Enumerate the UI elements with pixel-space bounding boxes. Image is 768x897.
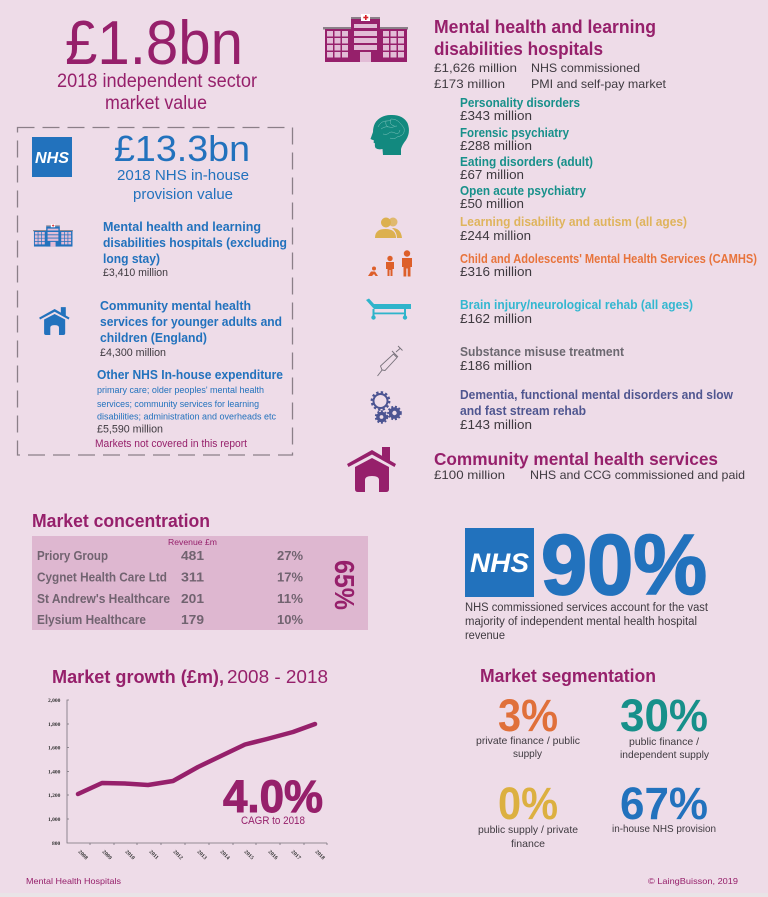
footer: report name: Mental Health Hospitals — [26, 876, 121, 886]
icon: syringe — [378, 346, 402, 376]
headline: independent sector market value: 2018 independent sector — [57, 71, 258, 92]
headline: independent sector market value: £1.8bn — [65, 9, 243, 78]
brain injury — [460, 298, 693, 326]
x axis labels: 2016 — [267, 849, 279, 861]
specialisms: teal group: £288 million — [460, 138, 532, 153]
CAGR callout: 4.0% — [223, 771, 323, 822]
icon: gears — [372, 392, 401, 423]
community services younger adults: children (England) — [100, 330, 207, 345]
specialisms: teal group: £67 million — [460, 167, 524, 182]
description: revenue — [465, 630, 505, 642]
heading: hospitals: £1,626 million — [434, 61, 517, 75]
icon: small house — [39, 307, 70, 335]
heading: community services — [434, 449, 745, 482]
specialisms: teal group — [460, 96, 593, 211]
CAMHS — [460, 252, 757, 279]
y axis labels: 800 — [52, 841, 60, 847]
stat: 67%: in-house NHS provision — [612, 823, 716, 835]
specialisms: teal group: Open acute psychiatry — [460, 184, 586, 198]
y axis labels: 1,200 — [48, 793, 61, 799]
row: St Andrew's: 11% — [277, 591, 303, 606]
NHS value heading — [114, 128, 250, 203]
stat: 67%: 67% — [620, 778, 708, 829]
row: Priory — [37, 548, 303, 563]
callout: NHS 90% — [465, 518, 709, 642]
substance misuse: Substance misuse treatment — [460, 345, 625, 359]
heading — [52, 667, 328, 687]
stat: 3%: private finance / public — [476, 735, 580, 747]
icon: NHS logo: NHS — [35, 150, 69, 167]
stat: 3%: supply — [513, 748, 543, 760]
y axis labels: 1,600 — [48, 746, 61, 752]
heading: hospitals — [434, 17, 667, 91]
y axis labels: 1,000 — [48, 817, 61, 823]
stat: 0%: public supply / private — [478, 824, 578, 836]
x axis labels: 2018 — [314, 849, 326, 861]
x axis labels: 2012 — [172, 849, 184, 861]
hospitals excluding long stay: disabilities hospitals (excluding — [103, 235, 287, 250]
icon: head with brain — [370, 115, 409, 155]
x axis labels: 2010 — [124, 849, 136, 861]
x axis labels: 2014 — [219, 849, 231, 861]
CAMHS: £316 million — [460, 264, 532, 279]
icon: small hospital — [33, 224, 73, 247]
x axis labels: 2017 — [290, 849, 302, 861]
other NHS expenditure: services; community services for learning — [97, 399, 259, 409]
learning disability: £244 million — [460, 228, 531, 243]
stat: 0% — [478, 778, 578, 850]
specialisms: teal group: Forensic psychiatry — [460, 126, 569, 140]
x axis labels: 2013 — [196, 849, 208, 861]
stat: 3% — [476, 690, 580, 760]
learning disability — [460, 215, 687, 243]
row: Cygnet: 17% — [277, 570, 303, 584]
substance misuse — [460, 345, 625, 373]
stat: 0%: finance — [511, 838, 545, 850]
y axis labels: 1,400 — [48, 770, 61, 776]
note: markets not covered: Markets not covered in this report — [95, 438, 247, 450]
icon: NHS logo — [32, 137, 72, 177]
hospitals excluding long stay — [103, 219, 287, 279]
dementia — [460, 388, 733, 432]
panel: market segmentation — [476, 666, 716, 850]
substance misuse: £186 million — [460, 358, 532, 373]
x axis labels: 2009 — [101, 849, 113, 861]
description: majority of independent mental health hospital — [465, 616, 697, 628]
row: Elysium — [37, 612, 303, 627]
row: Priory: Priory Group — [37, 548, 108, 563]
headline: independent sector market value: market value — [105, 93, 207, 114]
heading: hospitals: NHS commissioned — [531, 61, 640, 75]
brain injury: £162 million — [460, 311, 532, 326]
panel: market concentration — [32, 511, 368, 630]
dashed panel border — [18, 128, 292, 455]
row: Elysium: 10% — [277, 612, 303, 627]
NHS value heading: provision value — [133, 186, 233, 203]
stat: 30%: 30% — [620, 690, 708, 741]
specialisms: teal group: Personality disorders — [460, 96, 580, 110]
panel: NHS in-house provision — [18, 128, 292, 455]
specialisms: teal group: £343 million — [460, 108, 532, 123]
dementia: £143 million — [460, 417, 532, 432]
footer: copyright: © LaingBuisson, 2019 — [648, 876, 738, 886]
stat: 30%: independent supply — [620, 749, 710, 761]
other NHS expenditure: primary care; older peoples' mental health — [97, 385, 264, 395]
other NHS expenditure — [97, 367, 283, 436]
row: Elysium: Elysium Healthcare — [37, 612, 146, 627]
icon: hospital bed — [366, 298, 411, 320]
community services younger adults: Community mental health — [100, 298, 251, 313]
total share: 65% — [329, 560, 360, 610]
x axis labels: 2008 — [77, 849, 89, 861]
stat: 0%: 0% — [498, 778, 558, 829]
description: NHS commissioned services account for the vast — [465, 602, 709, 614]
brain injury: Brain injury/neurological rehab (all ages) — [460, 298, 693, 312]
hospitals excluding long stay: £3,410 million — [103, 267, 168, 279]
icon: NHS logo — [465, 528, 534, 597]
other NHS expenditure: Other NHS In-house expenditure — [97, 367, 283, 382]
y axis labels: 2,000 — [48, 698, 61, 704]
panel: market growth chart — [48, 667, 328, 861]
NHS value heading: 2018 NHS in-house — [117, 167, 249, 184]
y axis labels — [48, 698, 61, 847]
specialisms: teal group: £50 million — [460, 196, 524, 211]
big percentage: 90% — [541, 518, 707, 613]
other NHS expenditure: £5,590 million — [97, 424, 163, 436]
row: Elysium: 179 — [181, 612, 204, 627]
heading: community services: £100 million — [434, 468, 505, 482]
community services younger adults: services for younger adults and — [100, 314, 282, 329]
row: Priory: 27% — [277, 548, 303, 563]
headline: independent sector market value — [57, 9, 258, 114]
learning disability: Learning disability and autism (all ages) — [460, 215, 687, 229]
row: St Andrew's: 201 — [181, 591, 204, 606]
other NHS expenditure: disabilities; administration and overheads etc — [97, 412, 276, 422]
specialisms: teal group: Eating disorders (adult) — [460, 155, 593, 169]
row: St Andrew's — [37, 591, 303, 606]
row: Cygnet — [37, 570, 303, 584]
community services younger adults — [100, 298, 282, 359]
hospitals excluding long stay: long stay) — [103, 251, 160, 266]
row: St Andrew's: St Andrew's Healthcare — [37, 591, 170, 606]
icon: family — [368, 250, 412, 276]
heading: community services: NHS and CCG commissioned and paid — [530, 468, 745, 482]
heading: Market segmentation — [480, 666, 656, 686]
x axis labels: 2015 — [243, 849, 255, 861]
y axis labels: 1,800 — [48, 722, 61, 728]
heading: hospitals: PMI and self-pay market — [531, 77, 667, 91]
icon: NHS logo: NHS — [470, 548, 529, 578]
x axis labels: 2011 — [148, 849, 160, 861]
hospitals excluding long stay: Mental health and learning — [103, 219, 261, 234]
heading: hospitals: disabilities hospitals — [434, 39, 603, 59]
dementia: and fast stream rehab — [460, 404, 586, 418]
row: Priory: 481 — [181, 548, 204, 563]
axes — [67, 700, 327, 845]
heading: Market concentration — [32, 511, 210, 531]
column header: Revenue £m — [168, 538, 217, 547]
stat: 3%: 3% — [498, 690, 558, 741]
NHS value heading: £13.3bn — [114, 128, 250, 169]
heading: hospitals: Mental health and learning — [434, 17, 656, 37]
icon: people — [375, 218, 402, 238]
icon: house — [347, 447, 396, 492]
row: Cygnet: 311 — [181, 570, 204, 584]
heading: community services: Community mental health services — [434, 449, 718, 469]
community services younger adults: £4,300 million — [100, 347, 166, 359]
description — [465, 602, 709, 642]
icon: hospital — [323, 14, 408, 62]
dementia: Dementia, functional mental disorders and slow — [460, 388, 733, 402]
row: Cygnet: Cygnet Health Care Ltd — [37, 570, 167, 584]
table background — [32, 536, 368, 630]
x axis labels — [77, 849, 326, 861]
stat: 30%: public finance / — [629, 736, 699, 748]
CAGR callout: CAGR to 2018 — [241, 815, 305, 827]
heading: hospitals: £173 million — [434, 77, 505, 91]
heading: 2008 - 2018 — [227, 667, 328, 687]
heading: Market growth (£m), — [52, 667, 224, 687]
line series — [78, 724, 315, 794]
